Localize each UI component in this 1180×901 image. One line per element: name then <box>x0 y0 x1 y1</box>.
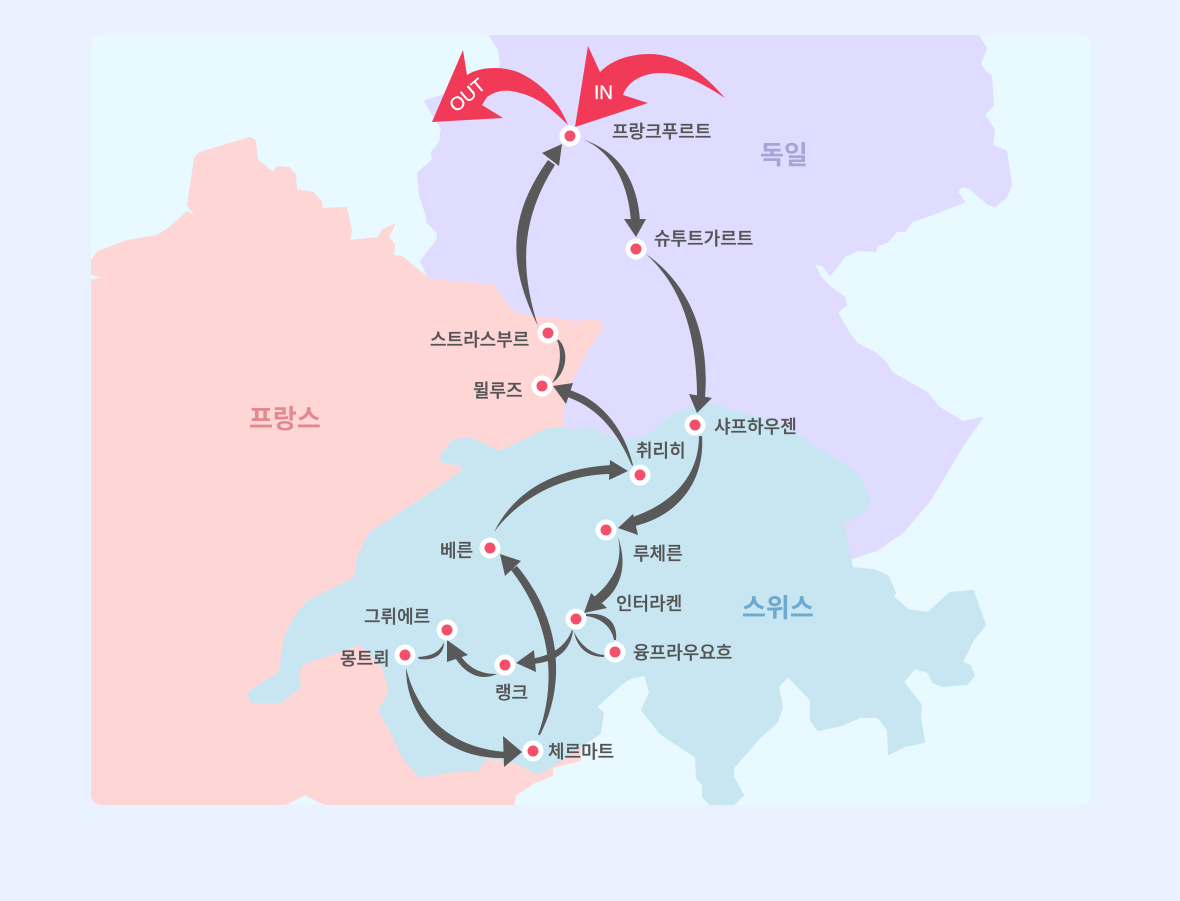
label: Switzerland: 스위스 <box>742 593 814 623</box>
region: Germany <box>418 34 1011 560</box>
arrow: Strasbourg to Frankfurt <box>516 144 562 326</box>
arrow: OUT: OUT <box>446 75 490 117</box>
label: Jungfraujoch: 융프라우요흐 <box>633 643 732 663</box>
stop: Interlaken <box>566 608 586 630</box>
arrow: Gruyeres to Montreux <box>418 642 444 659</box>
label: Zurich: 취리히 <box>636 441 686 461</box>
arrow: OUT <box>432 50 568 125</box>
label: Lauterbrunnen: 랭크 <box>495 683 528 703</box>
stop: Schaffhausen <box>684 414 706 436</box>
stop: Bern <box>480 538 500 558</box>
region: France <box>90 138 603 806</box>
arrow: Bern to Zurich <box>494 460 628 532</box>
label: Germany: 독일 <box>760 140 808 170</box>
region: Switzerland <box>248 404 985 806</box>
label: Stuttgart: 슈투트가르트 <box>654 229 753 249</box>
route arrows <box>406 139 712 767</box>
label: Strasbourg: 스트라스부르 <box>430 330 529 350</box>
route stops <box>394 126 706 762</box>
label: Zermatt: 체르마트 <box>548 742 614 762</box>
stop: Lucerne <box>596 520 616 540</box>
stop: Gruyeres <box>436 620 458 640</box>
label: Bern: 베른 <box>440 541 473 561</box>
label: Interlaken: 인터라켄 <box>616 594 682 614</box>
arrow: Jungfraujoch to Interlaken <box>574 632 604 657</box>
stop: Stuttgart <box>626 238 646 260</box>
arrow: IN <box>575 46 725 127</box>
arrow: Zurich to Mulhouse <box>553 383 633 466</box>
stop: Zermatt <box>522 740 544 762</box>
stop: Jungfraujoch <box>604 642 626 662</box>
arrow: Frankfurt to Stuttgart <box>582 139 646 237</box>
arrow: IN: IN <box>594 83 613 104</box>
arrow: Zermatt to Bern <box>500 554 556 735</box>
panel: map background <box>91 35 1091 805</box>
label: Frankfurt: 프랑크푸르트 <box>612 122 711 142</box>
stop: Montreux <box>394 644 416 666</box>
label: Lucerne: 루체른 <box>633 544 683 564</box>
stop: Mulhouse <box>532 376 552 396</box>
stop: Zurich <box>630 464 650 486</box>
label: Montreux: 몽트뢰 <box>340 649 390 669</box>
city labels <box>340 122 797 762</box>
stop: Strasbourg <box>538 322 558 344</box>
map regions <box>90 34 1011 806</box>
arrow: Mulhouse to Strasbourg <box>552 340 565 383</box>
label: Mulhouse: 뮐루즈 <box>473 381 523 401</box>
arrow: Lauterbrunnen to Gruyeres <box>447 640 497 677</box>
arrow: Interlaken to Jungfraujoch <box>586 614 616 640</box>
map infographic <box>91 35 1012 805</box>
label: France: 프랑스 <box>249 404 321 434</box>
arrow: Lucerne to Interlaken <box>584 537 623 613</box>
arrow: Montreux to Zermatt <box>406 668 522 767</box>
arrow: Interlaken to Lauterbrunnen <box>516 630 573 672</box>
label: Gruyeres: 그뤼에르 <box>364 607 430 627</box>
stop: Lauterbrunnen <box>494 654 516 676</box>
arrow: Schaffhausen to Lucerne <box>618 436 702 535</box>
arrow: Stuttgart to Schaffhausen <box>646 254 712 413</box>
label: Schaffhausen: 샤프하우젠 <box>714 417 797 437</box>
stop: Frankfurt <box>560 126 580 146</box>
